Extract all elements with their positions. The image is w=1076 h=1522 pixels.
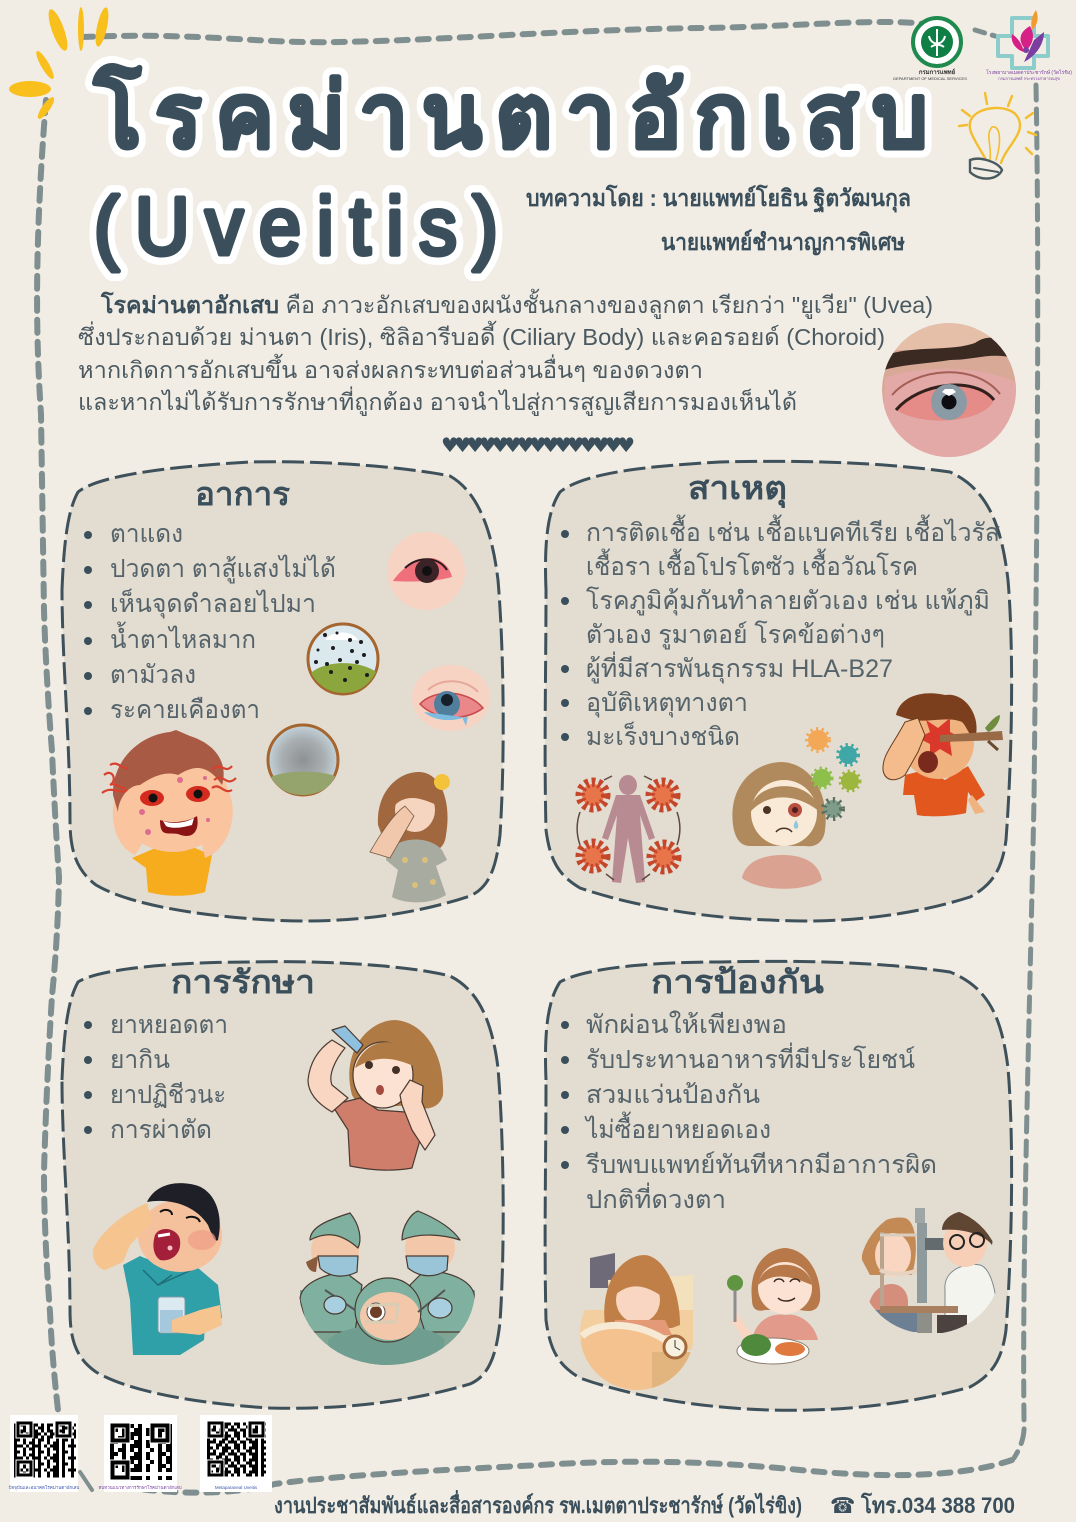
illustration: girl shielding eyes [370,772,450,902]
illustration: girl eating healthy [727,1248,820,1364]
prevention list: รับประทานอาหารที่มีประโยชน์ [586,1042,915,1074]
panel: causes [545,461,1012,921]
illustration: boy taking medicine [93,1183,222,1355]
prevention list: ปกติที่ดวงตา [586,1182,726,1214]
treatment list [84,1011,228,1144]
QR code 3 [200,1415,272,1492]
byline: บทความโดย : นายแพทย์โยธิน ฐิตวัฒนกุล [526,184,911,213]
logo: hospital [986,10,1072,82]
intro paragraph: หากเกิดการอักเสบขึ้น อาจส่งผลกระทบต่อส่วนอื่นๆ ของดวงตา [78,354,703,383]
cause list: ตัวเอง รูมาตอย์ โรคข้อต่างๆ [586,620,885,650]
logo: department of medical services [893,18,967,81]
illustration: boy with stick in eye [883,693,1003,816]
treatment list: ยาปฏิชีวนะ [110,1081,226,1109]
symptom list: ระคายเคืองตา [110,696,260,724]
heading: treatment: การรักษา [171,964,315,1000]
cause list: อุบัติเหตุทางตา [586,689,748,718]
illustration: floating germs [808,730,859,818]
byline: นายแพทย์ชำนาญการพิเศษ [661,229,905,256]
icon: yellow sun rays [9,6,111,121]
icon: floaters view [308,624,378,694]
illustration: girl with infected eye [732,762,826,889]
QR code 1 [9,1415,80,1492]
heading: symptoms: อาการ [195,476,290,512]
logo: hospital: กรมการแพทย์ กระทรวงสาธารณสุข [998,76,1060,82]
symptom list: ปวดตา ตาสู้แสงไม่ได้ [110,554,336,584]
intro paragraph: โรคม่านตาอักเสบ คือ ภาวะอักเสบของผนังชั้นกลางของลูกตา เรียกว่า "ยูเวีย" (Uvea) [100,289,933,319]
intro paragraph: และหากไม่ได้รับการรักษาที่ถูกต้อง อาจนำไปสู่การสูญเสียการมองเห็นได้ [78,386,797,416]
symptom list: ตามัวลง [110,661,196,689]
icon: blurred view [268,725,338,795]
title: English: (Uveitis) [94,180,498,272]
cause list: โรคภูมิคุ้มกันทำลายตัวเอง เช่น แพ้ภูมิ [586,586,990,616]
footer: department: งานประชาสัมพันธ์และสื่อสารองค์กร รพ.เมตตาประชารักษ์ (วัดไร่ขิง) [274,1489,802,1518]
treatment list: ยาหยอดตา [110,1011,228,1039]
heading: prevention: การป้องกัน [651,964,824,1000]
byline [526,184,911,256]
illustration: autoimmune body with viruses [577,775,680,883]
prevention list: ไม่ซื้อยาหยอดเอง [584,1111,771,1144]
title: Thai: โรคม่านตาอักเสบ [94,65,928,166]
icon: red eye [387,532,465,610]
prevention list [561,1010,937,1214]
cause list: เชื้อรา เชื้อโปรโตซัว เชื้อวัณโรค [586,548,918,581]
symptom list: น้ำตาไหลมาก [110,621,256,654]
title: Thai: โรคม่านตาอักเสบ [94,65,928,166]
symptom list [84,520,336,724]
treatment list: ยากิน [110,1046,170,1074]
logo: department of medical services: DEPARTMENT OF MEDICAL SERVICES [893,76,967,81]
cause list: ผู้ที่มีสารพันธุกรรม HLA-B27 [586,651,893,684]
illustration: boy with red eyes [102,730,236,896]
hearts divider: ♥♥♥♥♥♥♥♥♥♥♥♥♥♥♥ [441,433,635,457]
illustration: sleeping girl [578,1253,697,1395]
intro paragraph: ซึ่งประกอบด้วย ม่านตา (Iris), ซิลิอารีบอดี้ (Ciliary Body) และคอรอยด์ (Choroid) [78,321,885,350]
icon: light bulb [959,93,1036,179]
footer: telephone: ☎ โทร.034 388 700 [830,1492,1015,1519]
QR code 3: Metaparaneal Uveitis [215,1485,258,1490]
logo: hospital: โรงพยาบาลเมตตาประชารักษ์ (วัดไร่ขิง) [986,69,1072,76]
illustration: eye surgery [300,1211,475,1370]
prevention list: พักผ่อนให้เพียงพอ [586,1010,787,1039]
panel: symptoms [62,462,503,921]
QR code 2: ทบทวนแนวทางการรักษาโรคม่านตาอักเสบ [98,1484,182,1490]
symptom list: ตาแดง [110,520,183,548]
heading: causes: สาเหตุ [688,470,787,509]
photo: inflamed eye [882,323,1016,458]
QR code 2 [98,1415,182,1492]
cause list: มะเร็งบางชนิด [586,721,740,751]
icon: tearing eye [412,665,490,731]
treatment list: การผ่าตัด [110,1116,212,1144]
intro paragraph [78,289,933,416]
cause list: การติดเชื้อ เช่น เชื้อแบคทีเรีย เชื้อไวรัส [586,514,1000,547]
illustration: girl with eye drops [308,1020,443,1170]
illustration: eye exam [862,1208,997,1333]
panel: treatment [62,962,503,1408]
logo: department of medical services: กรมการแพทย์ [919,68,956,76]
QR code 1: ปัจจุบันและอนาคตโรคม่านตาอักเสบ [9,1484,80,1491]
symptom list: เห็นจุดดำลอยไปมา [110,588,316,619]
cause list [561,514,1000,751]
panel: prevention [545,961,1012,1410]
title: English: (Uveitis) [94,180,498,272]
prevention list: รีบพบแพทย์ทันทีหากมีอาการผิด [585,1151,937,1179]
prevention list: สวมแว่นป้องกัน [586,1081,760,1109]
